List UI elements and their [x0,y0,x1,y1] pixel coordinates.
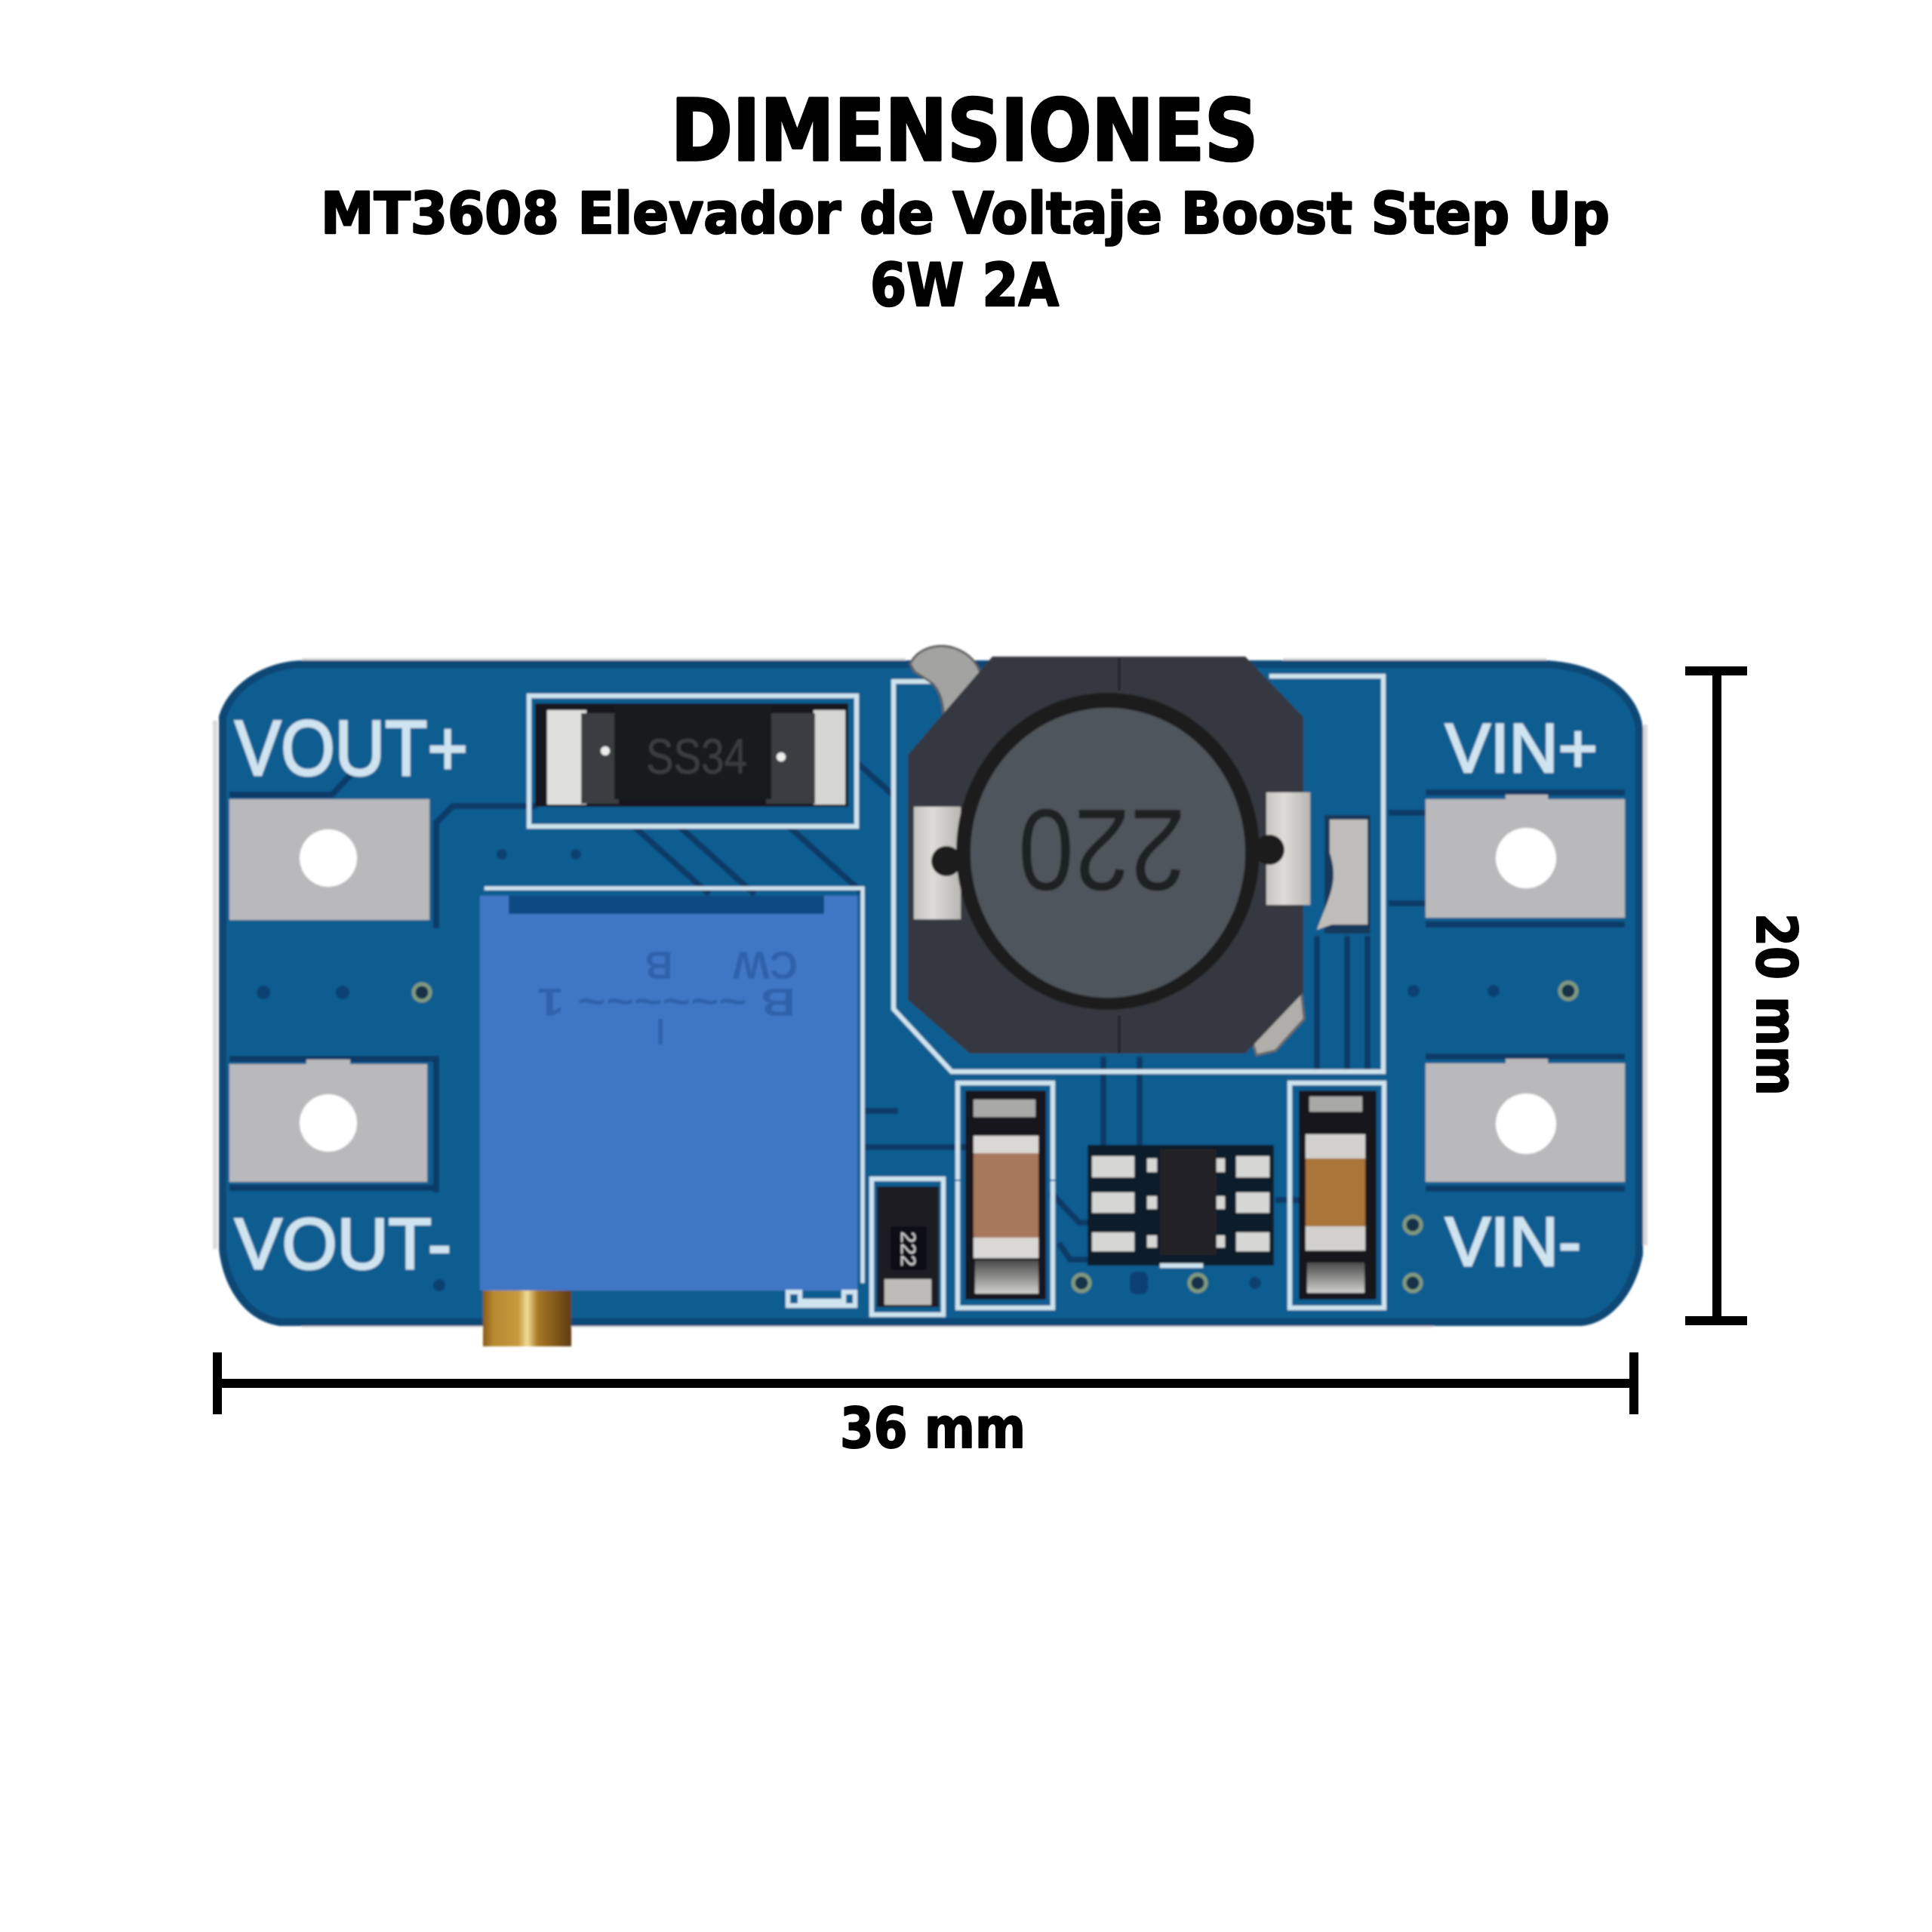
inductor 220: 220 [1018,785,1186,915]
subtitle rating: 6W 2A [870,252,1059,320]
vias [257,849,1577,1294]
label VIN-: VIN- [1445,1204,1581,1281]
width label: 36 mm [840,1396,1026,1461]
dimension: width 36 mm [213,1352,1634,1461]
potentiometer markings [537,943,798,1044]
diode SS34: SS34 [646,728,747,784]
inductor 220 [908,657,1310,1054]
width arrow [213,1352,1634,1414]
pad VIN+ [1426,795,1625,918]
potentiometer adjustment screw [483,1291,571,1346]
solder joint right [1317,815,1371,934]
pale board edge [215,660,1645,1325]
pcb base [223,664,1639,1322]
diode SS34 [529,696,857,826]
trimmer potentiometer [480,888,863,1291]
capacitor right [1290,1083,1384,1308]
pad VIN- [1426,1059,1625,1182]
label VOUT-: VOUT- [235,1204,451,1284]
solder joint top [910,646,981,717]
subtitle: MT3608 Elevador de Voltaje Boost Step Up [321,180,1610,247]
MT3608 chip [1088,1145,1274,1268]
label VOUT+: VOUT+ [235,705,468,792]
dimension: height 20 mm [1685,671,1808,1321]
inductor silkscreen outline [894,676,1383,1072]
title: DIMENSIONES [671,82,1258,180]
resistor 222: 222 [897,1232,920,1266]
solder joint bottom [1248,990,1304,1055]
height label: 20 mm [1743,913,1808,1096]
capacitor left [958,1083,1053,1308]
pad VOUT+ [229,799,429,920]
MT3608 circuit board [215,646,1645,1346]
silkscreen mark [788,1292,855,1306]
height arrow [1685,671,1747,1321]
potentiometer markings: CW [732,943,798,986]
pcb traces [229,762,1625,1260]
label VIN+: VIN+ [1445,710,1598,787]
potentiometer markings: B [645,943,673,986]
title block [321,82,1610,320]
pad VOUT- [229,1060,427,1182]
resistor 222 [872,1179,943,1315]
potentiometer markings: B ~~~~~~ 1 [537,980,795,1023]
